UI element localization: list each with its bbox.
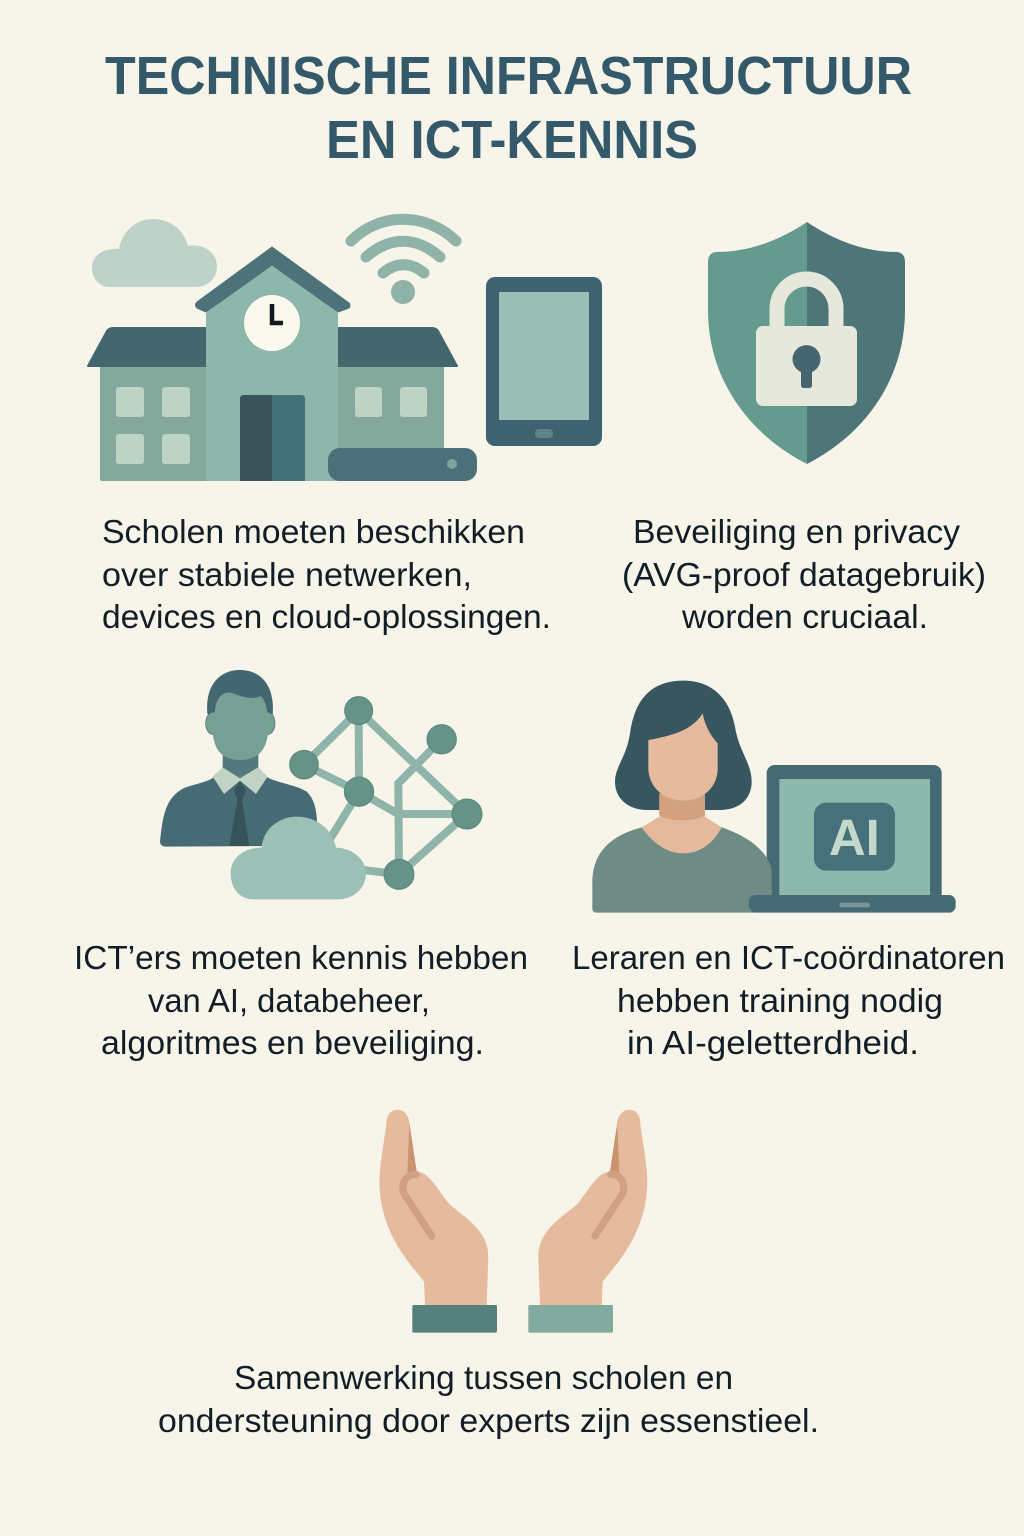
icon: tablet [486, 277, 602, 446]
text: security: Beveiliging en privacy [633, 513, 961, 550]
icon: router [328, 448, 477, 481]
text: networks: Scholen moeten beschikken [102, 513, 525, 550]
icon: wifi [351, 219, 456, 304]
text: networks: over stabiele netwerken, [102, 556, 472, 593]
text: ICT knowledge: van AI, databeheer, [148, 982, 430, 1019]
text: ICT knowledge: ICT’ers moeten kennis hebben [74, 939, 528, 976]
text: ICT knowledge: algoritmes en beveiliging. [101, 1024, 484, 1061]
text: teacher training: Leraren en ICT-coördinatoren [572, 939, 1005, 976]
text: teacher training: hebben training nodig [617, 982, 943, 1019]
title [105, 46, 912, 170]
cloud [231, 817, 366, 899]
text: collaboration: ondersteuning door experts zijn essenstieel. [158, 1402, 819, 1439]
laptop [748, 765, 956, 913]
text: security: worden cruciaal. [681, 598, 928, 635]
icon: school with cloud, wifi, tablet and router [88, 219, 602, 481]
icon: open hands [379, 1110, 647, 1333]
woman [592, 681, 772, 913]
left hand [379, 1110, 497, 1333]
text: ICT knowledge [74, 939, 528, 1061]
title: EN ICT-KENNIS [326, 110, 698, 170]
icon: ICT specialist with network and cloud [160, 670, 482, 899]
text: collaboration [158, 1359, 819, 1439]
title: TECHNISCHE INFRASTRUCTUUR [105, 46, 912, 106]
icon: cloud [92, 219, 217, 287]
school building [88, 247, 457, 481]
text: security: (AVG-proof datagebruik) [622, 556, 986, 593]
icon: teacher with AI laptop [592, 681, 956, 913]
network [290, 697, 482, 889]
person [160, 670, 317, 847]
text: networks [102, 513, 551, 635]
text: security [622, 513, 986, 635]
icon: shield with padlock [708, 222, 905, 464]
text: networks: devices en cloud-oplossingen. [102, 598, 551, 635]
text: teacher training: in AI-geletterdheid. [627, 1024, 919, 1061]
text: teacher training [572, 939, 1005, 1061]
laptop: AI [829, 809, 880, 866]
text: collaboration: Samenwerking tussen scholen en [234, 1359, 733, 1396]
right hand [528, 1110, 647, 1333]
